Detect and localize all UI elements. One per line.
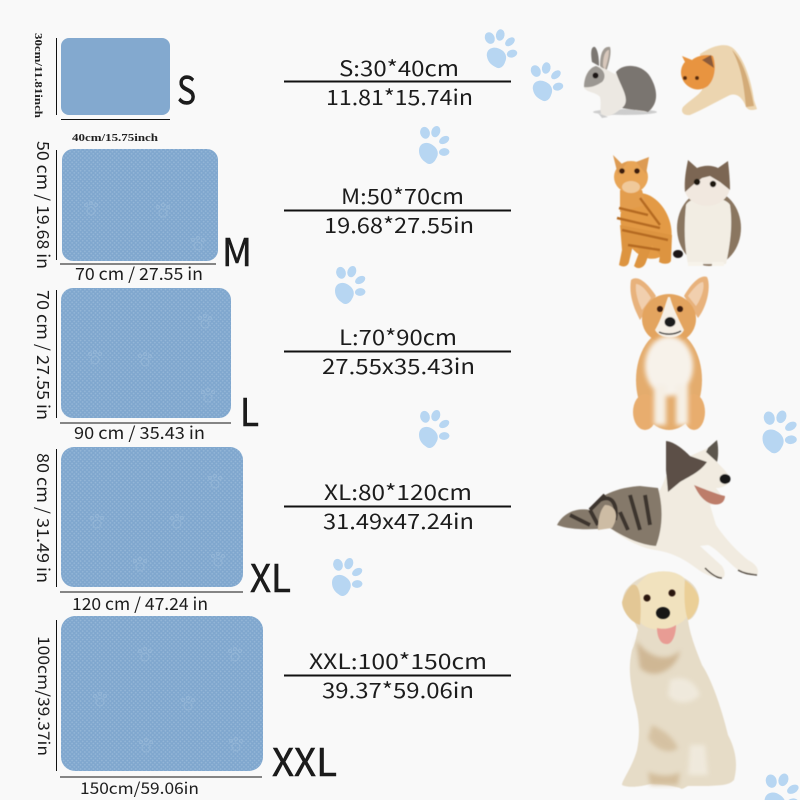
icon: paw print 5 [419, 409, 451, 448]
size letter XL: XL [250, 548, 291, 603]
size text block L: 27.55x35.43in [322, 351, 475, 381]
size text block M: M:50*70cm [341, 181, 464, 211]
dimension lines XXL [56, 620, 262, 777]
mat S [61, 38, 170, 115]
size text block XXL [284, 646, 511, 705]
size text block XL [284, 477, 511, 536]
size text block XXL: 39.37*59.06in [322, 675, 474, 705]
dimension lines XL [56, 449, 243, 592]
mat L [61, 288, 231, 418]
height label XL: 80 cm / 31.49 in [32, 453, 57, 583]
width label XL: 120 cm / 47.24 in [72, 590, 208, 615]
icon: paw print 8 [764, 772, 800, 800]
size letter S: S [177, 60, 196, 115]
panel: size M mat [32, 141, 252, 285]
size text block M [284, 181, 511, 240]
icon: paw print 6 [762, 409, 798, 453]
size text block M: 19.68*27.55in [324, 210, 474, 240]
dimension lines S [56, 38, 170, 120]
height label L: 70 cm / 27.55 in [32, 290, 57, 420]
panel: size S mat [32, 33, 196, 144]
size text block XL: XL:80*120cm [324, 477, 472, 507]
height label S: 30cm/11.81inch [32, 33, 43, 118]
width label S: 40cm/15.75inch [72, 132, 158, 144]
icon: paw print 4 [335, 265, 367, 304]
illustration: white and brown cat [673, 160, 741, 266]
mat M [62, 149, 218, 261]
mat XL [61, 447, 243, 587]
illustration: rabbit [584, 47, 657, 118]
size letter L: L [240, 382, 259, 437]
size text block S [284, 53, 511, 112]
width label L: 90 cm / 35.43 in [74, 419, 205, 444]
size text block S: S:30*40cm [339, 53, 459, 83]
size text block XL: 31.49x47.24in [323, 506, 474, 536]
illustration: orange kitten [681, 45, 757, 115]
size text block XXL: XXL:100*150cm [309, 646, 487, 676]
dimension lines M [56, 150, 216, 264]
size text block S: 11.81*15.74in [326, 82, 473, 112]
size text block L: L:70*90cm [339, 322, 457, 352]
illustration: golden retriever [622, 571, 736, 789]
icon: paw print 7 [332, 557, 364, 596]
mat XXL [61, 616, 263, 771]
width label M: 70 cm / 27.55 in [75, 260, 203, 285]
size letter M: M [222, 222, 252, 277]
illustration: merle border collie [557, 440, 758, 578]
height label M: 50 cm / 19.68 in [32, 141, 57, 269]
panel: size XL mat [32, 447, 291, 615]
width label XXL: 150cm/59.06in [80, 775, 199, 799]
size letter XXL: XXL [272, 732, 337, 787]
height label XXL: 100cm/39.37in [33, 636, 57, 756]
size text block L [284, 322, 511, 381]
icon: paw print 2 [528, 59, 567, 103]
panel: size XXL mat [33, 616, 337, 799]
illustration: orange tabby cat [611, 155, 681, 268]
icon: paw print 1 [482, 26, 521, 70]
dimension lines L [56, 290, 231, 423]
icon: paw print 3 [419, 125, 451, 164]
panel: size L mat [32, 288, 259, 444]
illustration: corgi [630, 276, 709, 430]
